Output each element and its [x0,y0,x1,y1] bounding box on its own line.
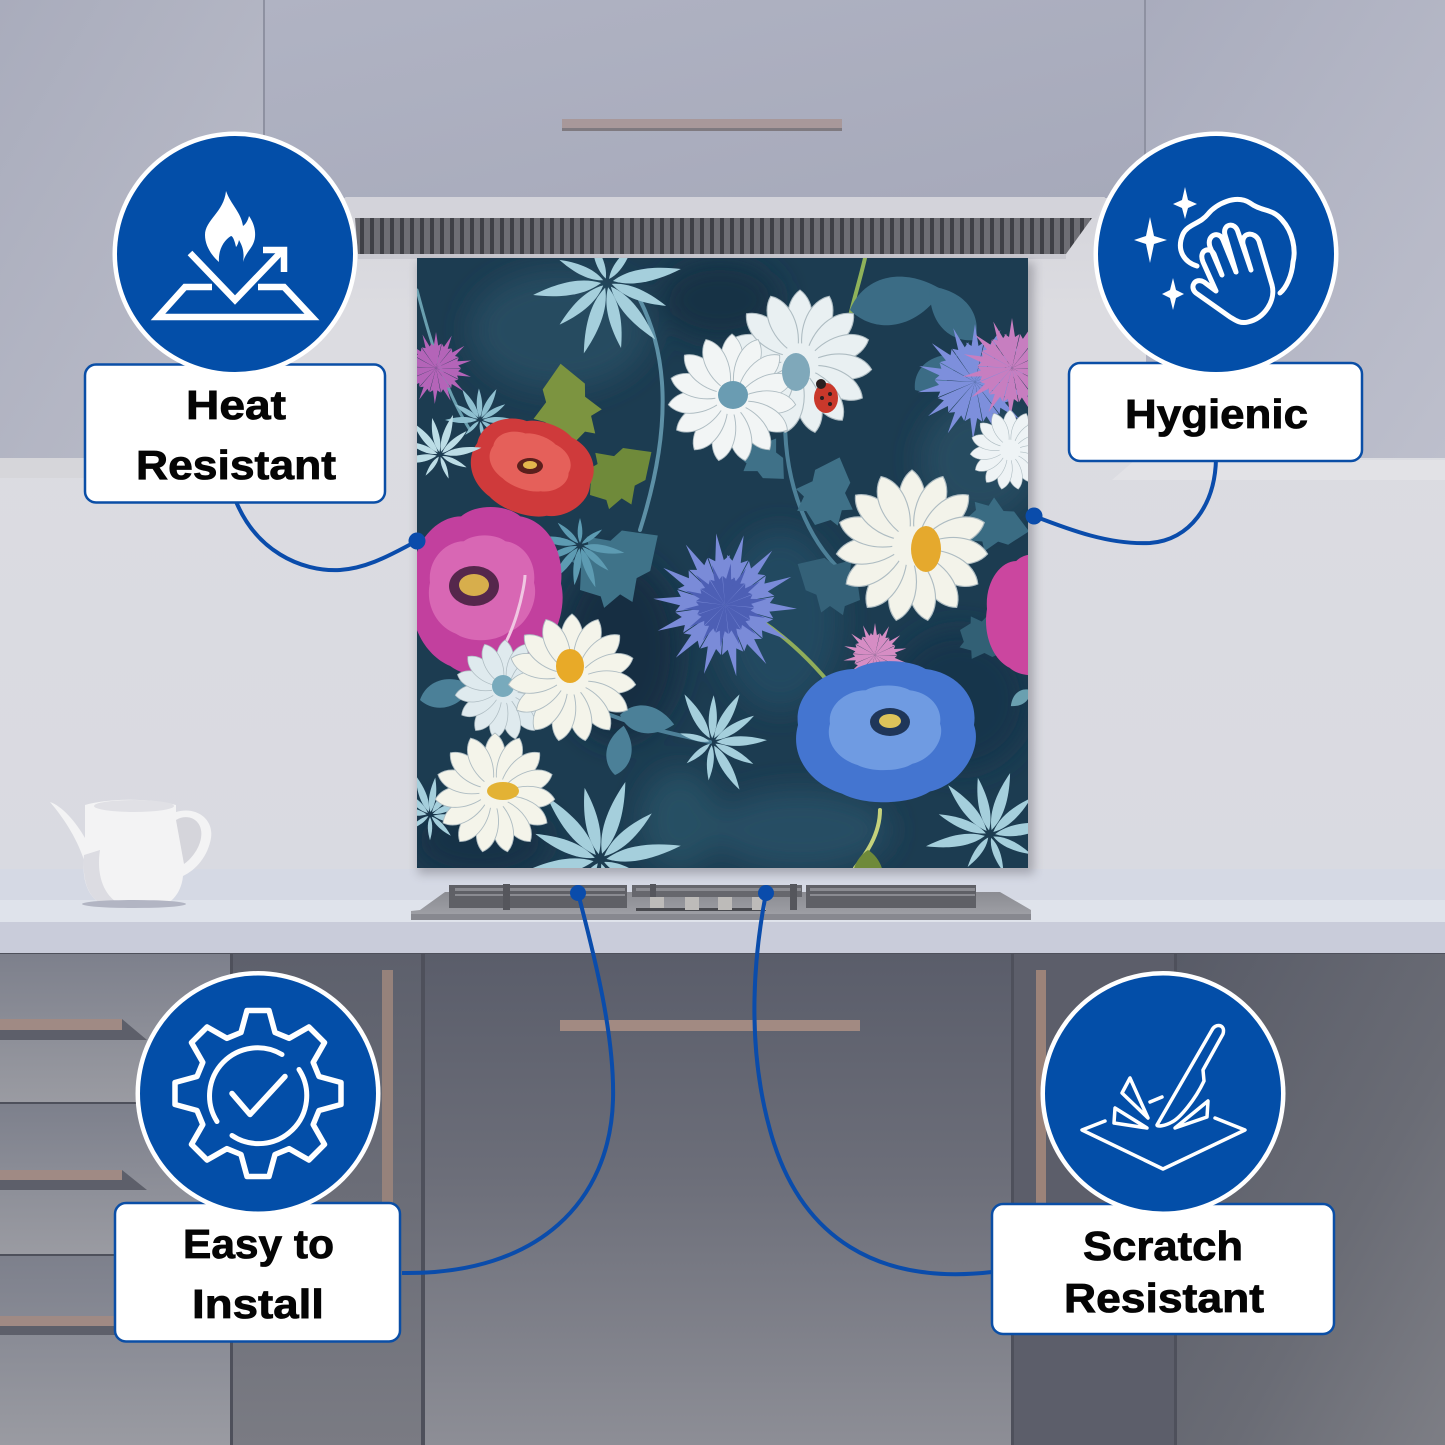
label: Hygienic [1069,363,1362,461]
callout: Scratch Resistant [754,885,1334,1334]
label: Heat Resistant: Heat [186,382,286,428]
upper right cabinet [1112,0,1445,480]
label: Easy to Install: Easy to [183,1221,334,1267]
magenta poppy [411,507,563,676]
label: Heat Resistant [85,364,385,502]
label: Easy to Install: Install [192,1281,324,1327]
connector: heat [235,499,426,570]
kettle [50,800,211,908]
stems [417,258,880,868]
ladybug [814,379,838,413]
worktop [0,869,1445,953]
cornflowers [400,318,1062,694]
callout: Hygienic [1026,132,1362,543]
magenta poppy at right edge [986,554,1028,676]
connector: scratch [754,885,992,1274]
gas hob [411,884,1031,920]
upper left cabinet [0,0,265,478]
upper centre cabinet [265,0,1145,198]
red poppy [470,418,594,517]
label: Easy to Install [115,1203,400,1342]
connector: hygienic [1026,459,1216,543]
panel: floral glass splashback [417,258,1028,868]
blue poppy [796,661,976,802]
label: Scratch Resistant: Resistant [1064,1275,1264,1321]
lower cabinets [0,953,1445,1445]
label: Hygienic: Hygienic [1125,391,1308,437]
callout: Easy to Install [115,885,613,1342]
panel shading [410,260,1040,880]
connector: install [402,885,613,1273]
spiky pale blue flowers [382,238,1055,908]
dark blue leaves [416,267,1034,777]
callout: Heat Resistant [85,132,426,570]
label: Scratch Resistant [992,1204,1334,1334]
label: Heat Resistant: Resistant [136,442,336,488]
icon: knife scratching surface [1040,971,1286,1216]
label: Scratch Resistant: Scratch [1083,1223,1243,1269]
icon: flame deflected from surface [112,132,358,376]
wall background [0,0,1445,880]
green leaves [526,359,883,912]
icon: gear with check [136,971,380,1216]
white daisies [398,290,1051,854]
panel shadow [418,262,1034,874]
icon: hand wiping with sparkles [1094,132,1338,376]
range hood [345,197,1105,259]
